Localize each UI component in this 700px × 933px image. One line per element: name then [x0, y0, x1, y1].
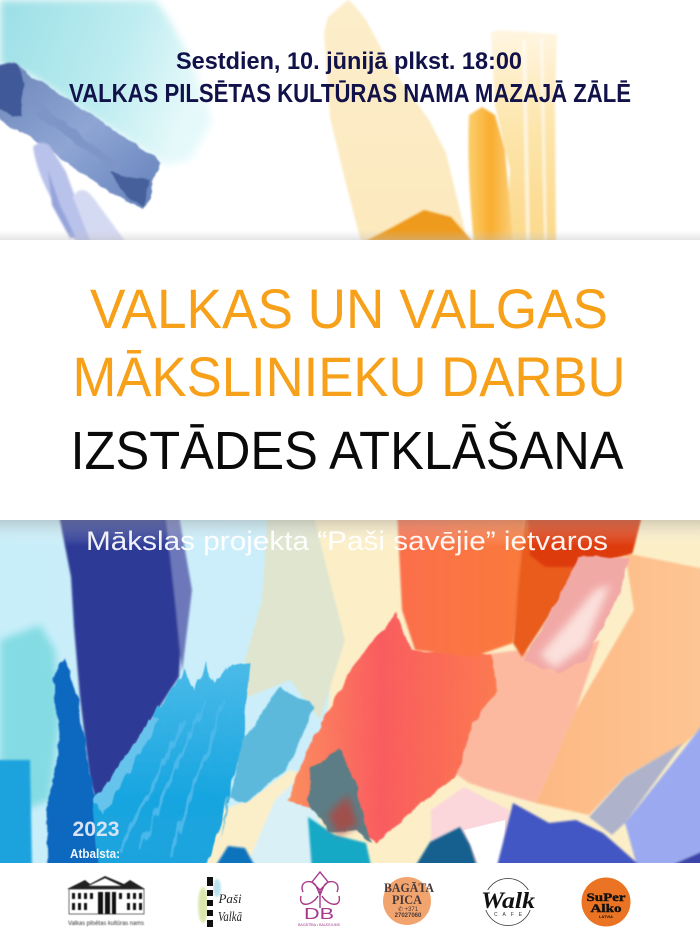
wash: pale yellow centre — [205, 510, 700, 870]
wash: peach large — [450, 553, 700, 815]
logo: Super Alko: Alko — [590, 903, 622, 915]
logo: DB — [298, 872, 340, 927]
logo: Bagata Pica: PICA — [392, 893, 422, 907]
stroke: orange-red — [397, 510, 525, 657]
logo: DB: DB — [304, 906, 334, 923]
logo: Pasi Valka: Paši — [217, 891, 242, 906]
texture: pale pink — [522, 557, 629, 673]
block: cyan bottom-left — [0, 760, 32, 870]
logo: Walk Cafe: Walk — [481, 888, 536, 913]
logo: Bagata Pica — [383, 877, 434, 925]
logo: Walk Cafe: CAFE — [494, 912, 523, 918]
logo: Super Alko: SuPer — [586, 892, 626, 904]
brush stroke: gold streaks — [468, 30, 557, 245]
stroke: muted teal and dark red — [308, 748, 370, 843]
title line 3: IZSTĀDES ATKLĀŠANA — [70, 421, 624, 481]
stroke: coral — [286, 613, 498, 843]
wash: aqua left — [0, 625, 60, 820]
subtitle: Mākslas projekta “Paši savējie” ietvaros — [86, 526, 608, 556]
logo: Bagata Pica: 27027060 — [395, 913, 422, 919]
panel: sponsor logos — [0, 863, 700, 933]
stroke: bright blue — [92, 660, 252, 863]
wash: pink and white — [431, 787, 509, 870]
panel: white title band — [0, 240, 700, 520]
heading: venue: VALKAS PILSĒTAS KULTŪRAS NAMA MAZAJĀ ZĀLĒ — [69, 80, 631, 108]
logo: Walk Cafe — [478, 878, 540, 926]
stroke: teal wash — [220, 687, 315, 840]
stroke: teal bottom — [308, 817, 372, 870]
stroke: royal blue — [45, 658, 100, 863]
brush stroke: indigo — [0, 62, 161, 210]
brush stroke: amber — [364, 210, 473, 242]
logo: Bagata Pica: BAGĀTA — [384, 881, 434, 895]
logo: Valka culture house — [67, 876, 145, 927]
title line 1: VALKAS UN VALGAS — [90, 277, 608, 340]
title line 2: MĀKSLINIEKU DARBU — [72, 345, 626, 408]
stroke: navy — [58, 510, 192, 803]
logo: Valka culture house: Valkas pilsētas kultūras nams — [68, 920, 145, 927]
panel: top watercolour background — [0, 0, 700, 245]
logo: DB: BAGĀTĪBA • BAUDĪJUMS — [298, 922, 340, 927]
brush stroke: lavender — [33, 143, 128, 245]
logo: Super Alko — [582, 878, 630, 926]
brush stroke: aqua — [0, 0, 212, 165]
stroke: dark red drop — [528, 520, 642, 568]
logo: Super Alko: LATVIA — [599, 914, 613, 919]
logo: Pasi Valka: Valkā — [218, 910, 242, 925]
wash: periwinkle — [496, 726, 700, 863]
year: 2023 — [72, 818, 120, 841]
heading: date and time: Sestdien, 10. jūnijā plkst. 18:00 — [176, 48, 522, 75]
brush stroke: pale yellow — [324, 0, 466, 245]
logo: Bagata Pica: ✆ +371 — [398, 906, 419, 913]
panel: bottom watercolour artwork — [0, 510, 700, 890]
logo: Pasi Valka — [198, 877, 242, 927]
support label: Atbalsta: — [70, 847, 120, 861]
small dark dab — [215, 844, 255, 863]
top edge shading — [0, 520, 700, 546]
stroke: deep orange — [513, 510, 643, 657]
stroke: dark teal bottom — [415, 826, 478, 863]
